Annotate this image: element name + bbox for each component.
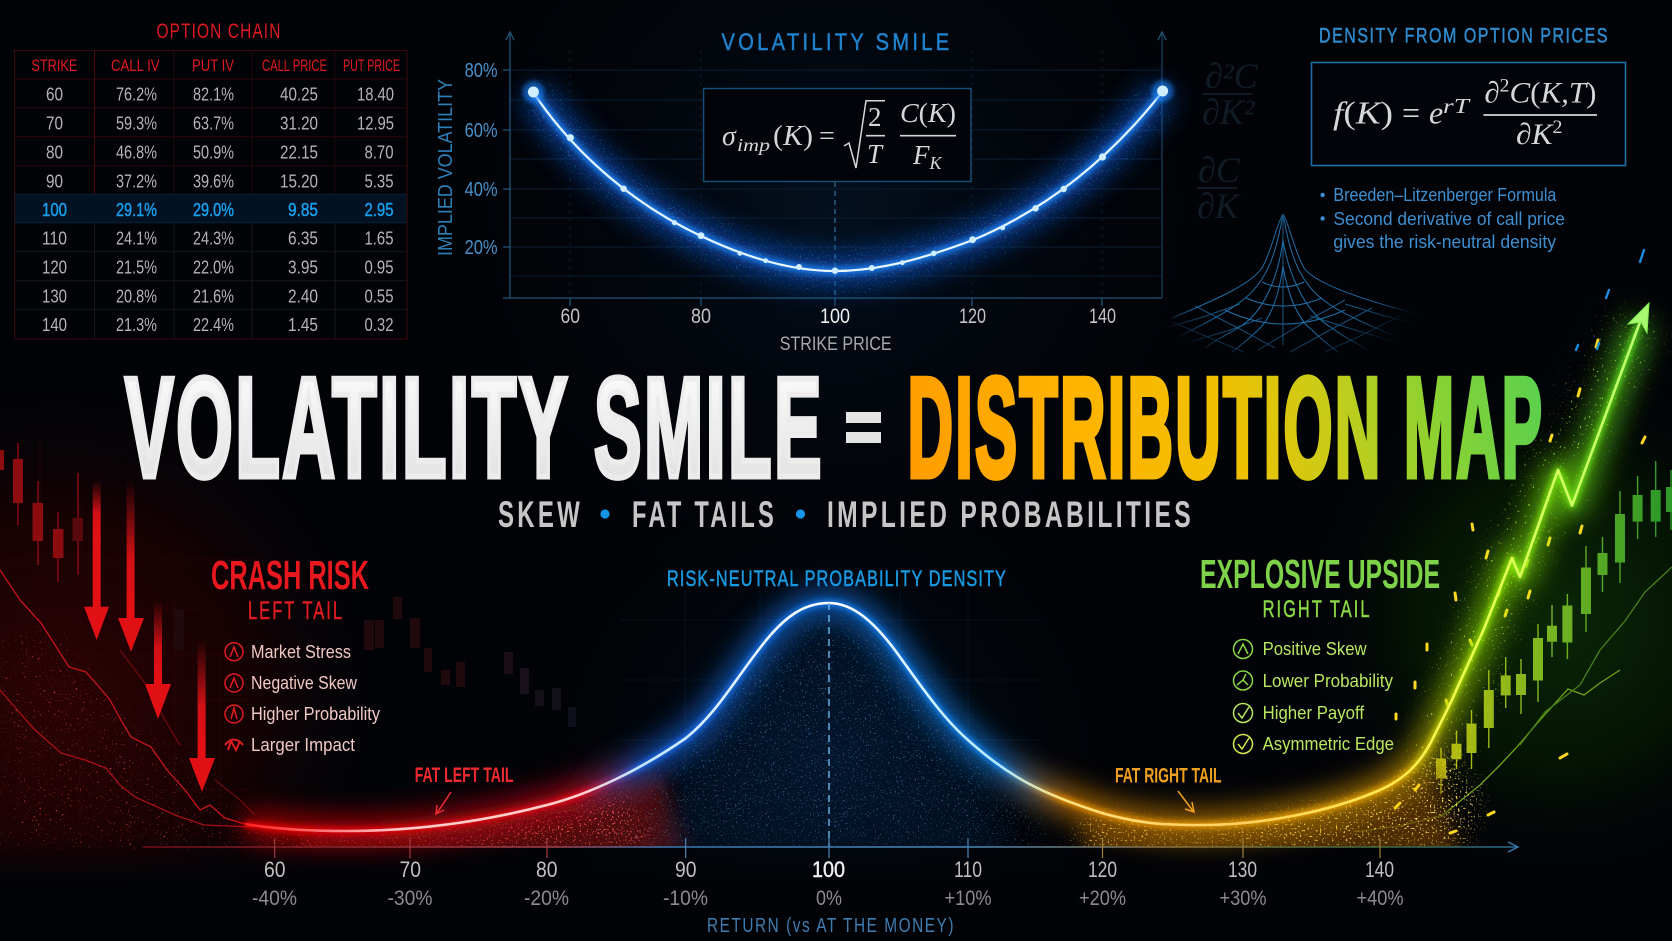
strike labels: 70 [400, 857, 421, 882]
strike labels: 60 [264, 857, 286, 882]
left crash scene [0, 443, 576, 850]
table rows: 29.1% [116, 199, 157, 220]
bullet notes: Second derivative of call price [1333, 209, 1565, 229]
heading: crash risk: CRASH RISK [211, 552, 369, 598]
formula box: density: (K,T) [1530, 76, 1596, 110]
table rows: 59.3% [116, 112, 157, 134]
strike labels: 90 [675, 857, 696, 882]
table rows: 37.2% [116, 170, 157, 192]
table rows: 100 [42, 199, 67, 220]
table rows: 9.85 [288, 199, 318, 220]
table rows: 90 [46, 170, 63, 192]
table header [31, 56, 400, 75]
callout: fat left tail: FAT LEFT TAIL [415, 764, 514, 787]
chart axes [503, 32, 1166, 306]
table rows: 0.95 [364, 256, 394, 278]
panel: option chain [14, 20, 407, 339]
y axis title: IMPLIED VOLATILITY [435, 79, 457, 256]
list: risks: Market Stress [251, 642, 351, 662]
density chart [143, 250, 1672, 937]
formula box: implied vol: = [819, 121, 835, 152]
bullet notes [1320, 185, 1565, 252]
table rows: 2.95 [364, 199, 394, 220]
x axis labels: 120 [959, 305, 986, 328]
smile data points [522, 80, 1174, 274]
list: risks: Higher Probability [251, 704, 380, 724]
table rows: 12.95 [357, 112, 394, 134]
formula box: implied vol: imp [737, 135, 770, 155]
faded background formulas [1197, 56, 1259, 226]
panel: explosive upside [1200, 551, 1440, 754]
y axis labels: 20% [465, 237, 498, 259]
return labels: +10% [944, 887, 992, 910]
red price lines [0, 570, 255, 827]
ATM dashed line [834, 182, 836, 298]
bullet notes: gives the risk-neutral density [1333, 232, 1556, 252]
callout: fat right tail: FAT RIGHT TAIL [1115, 764, 1222, 788]
list: risks [225, 642, 380, 755]
chart title: VOLATILITY SMILE [722, 29, 952, 56]
axis ticks [275, 838, 1380, 858]
table rows: 39.6% [193, 170, 234, 192]
x axis title: STRIKE PRICE [780, 334, 892, 355]
list: upside: Positive Skew [1263, 639, 1368, 659]
table rows: 18.40 [357, 84, 394, 104]
return labels: +20% [1079, 887, 1126, 910]
list: upside: Higher Payoff [1263, 703, 1365, 723]
table rows: 63.7% [193, 112, 234, 134]
panel: density from option prices [1165, 25, 1626, 352]
table grid [14, 50, 407, 339]
formula box: density: e [1429, 94, 1443, 130]
table rows: 22.4% [193, 314, 234, 335]
y axis labels: 60% [465, 120, 498, 142]
table rows: 21.5% [116, 256, 157, 278]
x axis labels: 60 [560, 305, 580, 328]
list: upside: Asymmetric Edge [1263, 734, 1394, 754]
subheading: right tail: RIGHT TAIL [1263, 596, 1372, 623]
list: risks: Negative Skew [251, 673, 358, 693]
callout: fat right tail [1115, 764, 1222, 812]
callout: fat left tail [415, 764, 514, 814]
return labels: 0% [816, 887, 842, 910]
panel: crash risk [211, 552, 380, 755]
formula box: density: 2 [1553, 117, 1562, 138]
icon: larger impact [225, 740, 243, 750]
table rows: 31.20 [280, 112, 318, 134]
x axis labels [560, 305, 1116, 328]
formula box: implied vol: T [867, 139, 884, 169]
y axis labels: 40% [465, 179, 498, 201]
table rows: 22.0% [193, 256, 234, 278]
table rows: 21.3% [116, 314, 157, 335]
area under bell [650, 625, 1015, 860]
table rows: 24.1% [116, 228, 157, 248]
return labels: +30% [1220, 887, 1266, 910]
icon: positive skew [1234, 640, 1252, 658]
heading: explosive upside: EXPLOSIVE UPSIDE [1200, 551, 1440, 597]
table rows: 80 [46, 142, 63, 162]
table header: PUT IV [192, 56, 235, 75]
formula box: implied vol [704, 88, 971, 182]
crash arrows [84, 480, 215, 792]
icon: negative skew [225, 674, 243, 692]
strike labels: 100 [812, 857, 845, 882]
table rows: 76.2% [116, 84, 157, 104]
faint candlesticks [174, 597, 576, 727]
table rows: 8.70 [364, 142, 394, 162]
return labels: -10% [663, 887, 708, 910]
table rows [42, 84, 394, 335]
table rows: 29.0% [193, 199, 234, 220]
table rows: 60 [46, 84, 63, 104]
table rows: 0.55 [364, 286, 394, 306]
table rows: 22.15 [280, 142, 318, 162]
table rows: 110 [42, 228, 67, 248]
red candlesticks [0, 443, 83, 582]
formula box: implied vol: F [913, 140, 930, 170]
smile curve [500, 60, 1180, 300]
table rows: 3.95 [288, 256, 318, 278]
return labels: +40% [1356, 887, 1404, 910]
table rows: 130 [42, 286, 67, 306]
table rows: 21.6% [193, 286, 234, 306]
density curve [245, 322, 1640, 831]
x axis labels: 140 [1089, 305, 1116, 328]
formula box: density: f(K) [1333, 94, 1393, 130]
ATM dashed line [828, 603, 830, 846]
strike labels: 110 [954, 857, 982, 882]
table rows: 140 [42, 314, 67, 335]
table rows: 82.1% [193, 84, 234, 104]
formula box: density: rT [1443, 94, 1471, 118]
strike labels: 80 [536, 857, 558, 882]
formula box: density: ∂ [1484, 76, 1499, 110]
formula box: implied vol: (K) [773, 121, 813, 152]
table header: CALL PRICE [262, 56, 327, 75]
strike labels [264, 857, 1394, 882]
formula box: density: = [1402, 94, 1420, 130]
table header: CALL IV [111, 56, 160, 75]
bullet notes: Breeden–Litzenberger Formula [1333, 185, 1557, 205]
table rows: 20.8% [116, 286, 157, 306]
title equals sign [846, 412, 881, 443]
table header: PUT PRICE [343, 56, 400, 75]
3D density surface [1165, 214, 1425, 352]
table rows: 15.20 [280, 170, 318, 192]
y axis labels: 80% [465, 60, 498, 82]
title part: volatility smile: VOLATILITY [125, 348, 570, 508]
table rows: 46.8% [116, 142, 157, 162]
y axis labels [465, 60, 498, 259]
subtitle: SKEW [498, 494, 583, 535]
strike labels: 140 [1365, 857, 1394, 882]
main title [125, 348, 1544, 508]
subtitle [498, 494, 1194, 535]
green candlesticks [1436, 461, 1672, 794]
formula box: implied vol: C(K) [900, 98, 956, 128]
faded background formulas: ∂²C [1205, 56, 1259, 96]
icon: lower probability [1234, 671, 1252, 690]
x axis labels: 100 [820, 305, 850, 328]
icon: asymmetric edge [1234, 734, 1252, 754]
table rows: 70 [46, 112, 63, 134]
formula box: density: 2 [1500, 76, 1510, 96]
formula box: implied vol: K [928, 153, 942, 173]
icon: higher probability [225, 705, 243, 723]
heading: option chain: OPTION CHAIN [156, 20, 282, 43]
table rows: 40.25 [280, 84, 318, 104]
sparks [1395, 340, 1645, 833]
faded background formulas: ∂C [1198, 150, 1241, 190]
table rows: 1.65 [364, 228, 394, 248]
return labels: -40% [252, 887, 297, 910]
icon: higher payoff [1234, 704, 1252, 722]
table rows: 5.35 [364, 170, 394, 192]
return labels: -30% [388, 887, 432, 910]
table rows: 6.35 [288, 228, 318, 248]
density chart title: RISK-NEUTRAL PROBABILITY DENSITY [667, 566, 1007, 591]
green price lines [1354, 567, 1672, 832]
list: upside: Lower Probability [1263, 671, 1393, 691]
table rows: 24.3% [193, 228, 234, 248]
return labels [252, 887, 1404, 910]
strike labels: 120 [1088, 857, 1117, 882]
subheading: left tail: LEFT TAIL [248, 597, 344, 625]
faded background formulas: ∂K [1197, 186, 1241, 226]
table header: STRIKE [31, 56, 77, 75]
x axis labels: 80 [691, 305, 711, 328]
area under right tail [1074, 758, 1467, 846]
upside arrowhead [1628, 303, 1649, 333]
table rows: 0.32 [364, 314, 394, 335]
panel: volatility smile chart [435, 29, 1180, 355]
table rows: 2.40 [288, 286, 318, 306]
strike labels: 130 [1228, 857, 1257, 882]
formula box: density [1312, 62, 1626, 166]
title part: volatility smile: SMILE [594, 348, 824, 508]
speckles [240, 290, 1672, 848]
subtitle: IMPLIED PROBABILITIES [827, 494, 1194, 535]
axis arrow tip [1508, 842, 1518, 852]
chart grid [510, 50, 1162, 298]
blue sparks [1576, 250, 1644, 350]
formula box: implied vol: σ [722, 121, 737, 152]
formula box: implied vol: 2 [868, 102, 882, 132]
density x axis [143, 846, 1517, 848]
table rows: 120 [42, 256, 67, 278]
formula box: density: ∂K [1516, 118, 1552, 151]
list: upside [1234, 639, 1394, 754]
icon: market stress [225, 643, 243, 661]
list: risks: Larger Impact [251, 735, 355, 755]
formula box: density: C [1510, 76, 1531, 110]
table rows: 50.9% [193, 142, 234, 162]
subtitle: FAT TAILS [632, 494, 777, 535]
faded background formulas: ∂K² [1202, 92, 1256, 132]
area under left tail [300, 770, 690, 860]
x axis title: return: RETURN (vs AT THE MONEY) [707, 915, 955, 937]
return labels: -20% [524, 887, 569, 910]
table rows: 1.45 [288, 314, 318, 335]
